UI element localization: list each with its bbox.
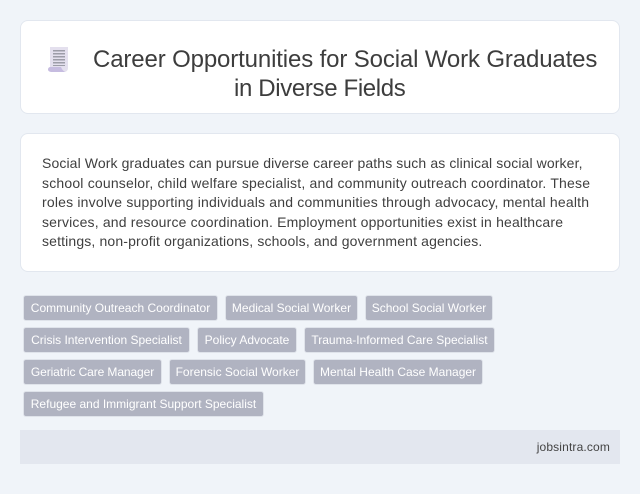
tag: [169, 359, 306, 385]
panel: header: [20, 20, 620, 114]
tag: [365, 295, 493, 321]
tag: Crisis Intervention Specialist: [31, 333, 182, 347]
summary paragraph: [42, 155, 590, 249]
title: Career Opportunities for Social Work Graduates: [93, 46, 597, 73]
tag: Community Outreach Coordinator: [31, 301, 210, 315]
tag: [197, 327, 297, 353]
tag: [23, 295, 218, 321]
tag: [304, 327, 495, 353]
title: [93, 46, 597, 102]
tag: [23, 359, 162, 385]
summary paragraph: school counselor, child welfare specialist, and community outreach coordinator. These: [42, 175, 590, 191]
icon: document scroll: [48, 47, 68, 72]
title: in Diverse Fields: [234, 75, 405, 102]
panel: summary text: [20, 133, 620, 272]
summary paragraph: Social Work graduates can pursue diverse career paths such as clinical social worker,: [42, 155, 583, 171]
summary paragraph: roles involve supporting individuals and communities through advocacy, mental health: [42, 194, 589, 210]
tag: [23, 327, 190, 353]
tag: [225, 295, 358, 321]
summary paragraph: services, and resource coordination. Employment opportunities exist in healthcare: [42, 214, 563, 230]
tag list: [23, 295, 495, 417]
footer bar: [20, 430, 620, 464]
tag: [23, 391, 264, 417]
tag: Refugee and Immigrant Support Specialist: [31, 397, 256, 411]
summary paragraph: settings, non-profit organizations, schools, and government agencies.: [42, 233, 482, 249]
tag: [313, 359, 483, 385]
tag: Mental Health Case Manager: [320, 365, 476, 379]
tag: School Social Worker: [372, 301, 486, 315]
tag: Geriatric Care Manager: [31, 365, 154, 379]
tag: Trauma-Informed Care Specialist: [311, 333, 488, 347]
footer source: jobsintra.com: [537, 440, 610, 454]
tag: Forensic Social Worker: [176, 365, 299, 379]
tag: Medical Social Worker: [232, 301, 351, 315]
tag: Policy Advocate: [205, 333, 289, 347]
